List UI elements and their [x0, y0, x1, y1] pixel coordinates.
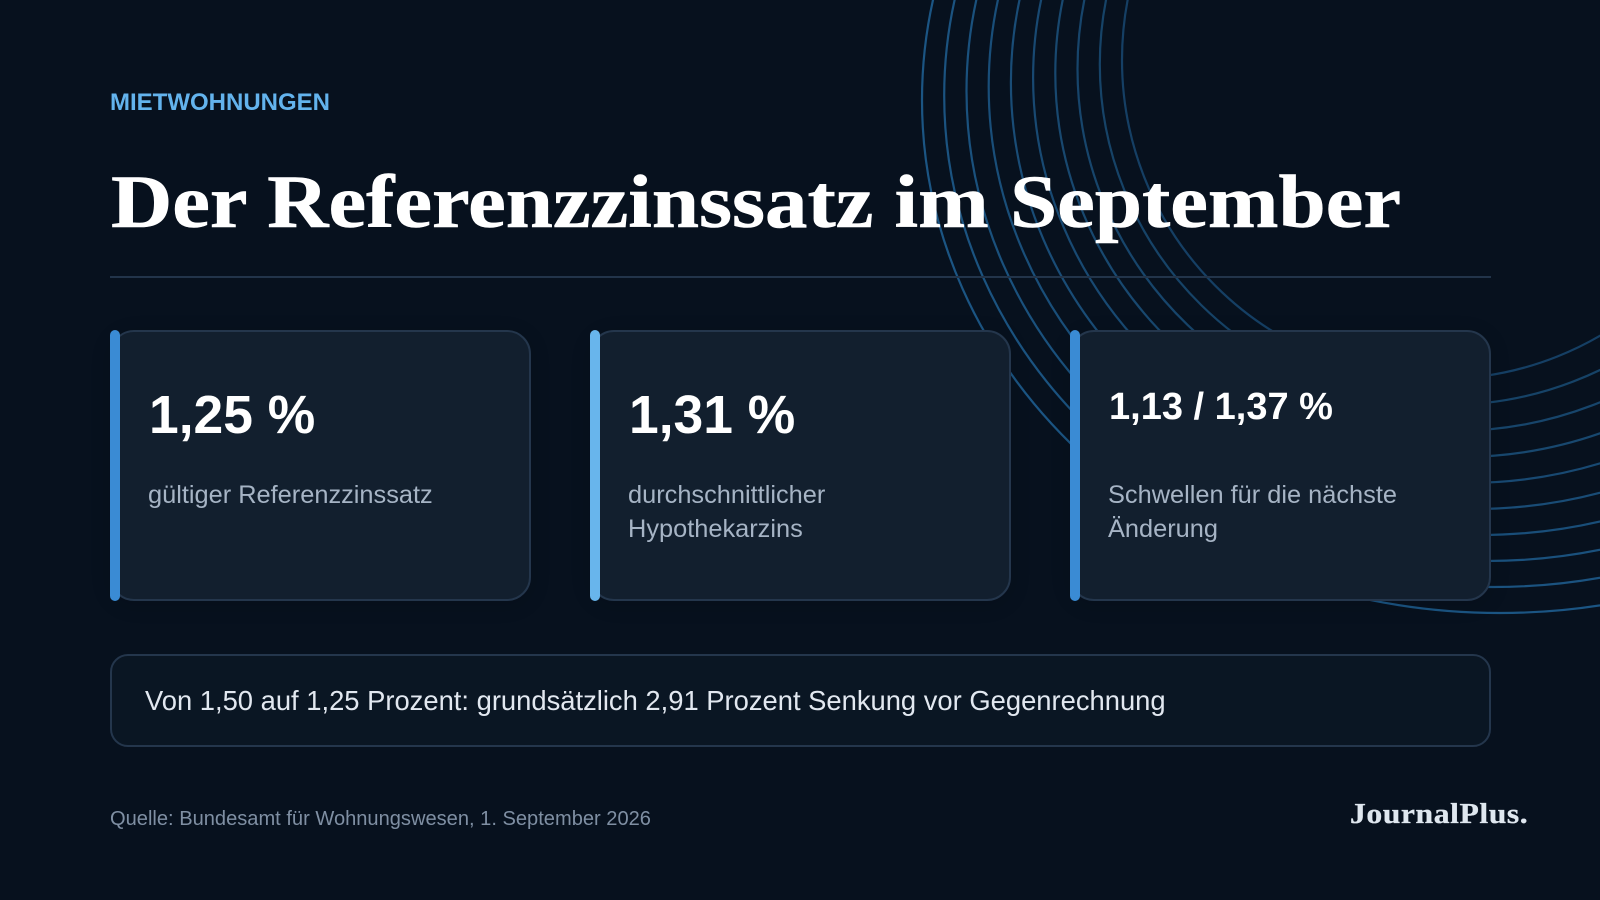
title: Der Referenzzinssatz im September: [111, 161, 1401, 244]
logo: JournalPlus.: [1350, 799, 1528, 830]
callout text: Von 1,50 auf 1,25 Prozent: grundsätzlich 2,91 Prozent Senkung vor Gegenrechnung: [145, 685, 1166, 716]
label: gültiger Referenzzinssatz: [148, 480, 433, 508]
panel: Schwellen: [1070, 330, 1491, 601]
panel: durchschnittlicher Hypothekarzins: [590, 330, 1011, 601]
callout: [110, 654, 1491, 747]
header divider: [110, 276, 1491, 278]
accent bar: [1070, 330, 1080, 601]
value: 1,31 %: [629, 386, 795, 445]
label: durchschnittlicher Hypothekarzins: [628, 480, 825, 542]
kicker: MIETWOHNUNGEN: [110, 89, 330, 116]
value: 1,13 / 1,37 %: [1109, 386, 1333, 428]
panel: gültiger Referenzzinssatz: [110, 330, 531, 601]
source: Quelle: Bundesamt für Wohnungswesen, 1. September 2026: [110, 808, 651, 830]
label: Schwellen für die nächste Änderung: [1108, 480, 1397, 542]
accent bar: [110, 330, 120, 601]
accent bar: [590, 330, 600, 601]
value: 1,25 %: [149, 386, 315, 445]
